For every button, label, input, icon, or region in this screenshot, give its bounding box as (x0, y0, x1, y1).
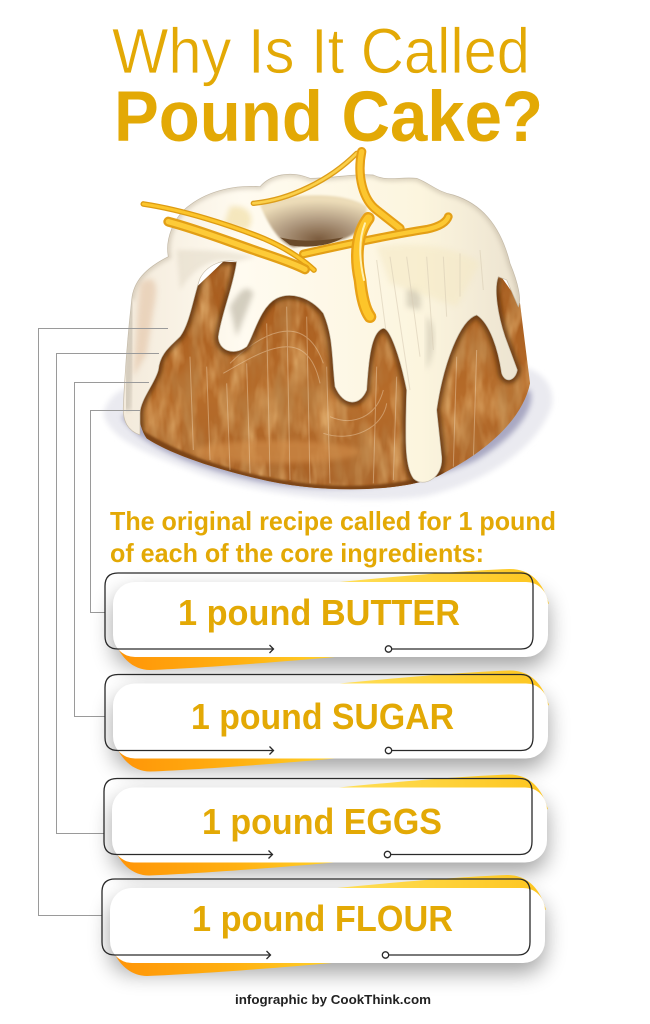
icing (123, 174, 520, 482)
card: sugar (105, 670, 549, 772)
intro text: The original recipe called for 1 pound (110, 506, 556, 536)
card: flour (102, 875, 546, 976)
card: butter (105, 569, 549, 670)
card: flour: 1 pound FLOUR (192, 898, 453, 939)
card: butter: 1 pound BUTTER (178, 592, 460, 633)
title (112, 15, 543, 157)
plate shadow (103, 367, 552, 500)
card: eggs (104, 774, 548, 876)
intro text (110, 506, 556, 568)
title: Pound Cake? (114, 78, 543, 157)
intro text: of each of the core ingredients: (110, 538, 484, 568)
connector lines from cake layers to ingredients (38, 328, 168, 916)
infographic canvas (38, 26, 562, 1006)
center hole (260, 195, 367, 247)
footer credit: infographic by CookThink.com (235, 992, 431, 1007)
dark shadow cast by icing (140, 261, 517, 482)
card: sugar: 1 pound SUGAR (191, 696, 454, 737)
card: eggs: 1 pound EGGS (202, 801, 442, 842)
cake body (137, 260, 533, 497)
lemon zest strips (143, 152, 448, 317)
illustration: bundt cake with icing and lemon zest (103, 152, 552, 500)
title: Why Is It Called (112, 15, 530, 87)
